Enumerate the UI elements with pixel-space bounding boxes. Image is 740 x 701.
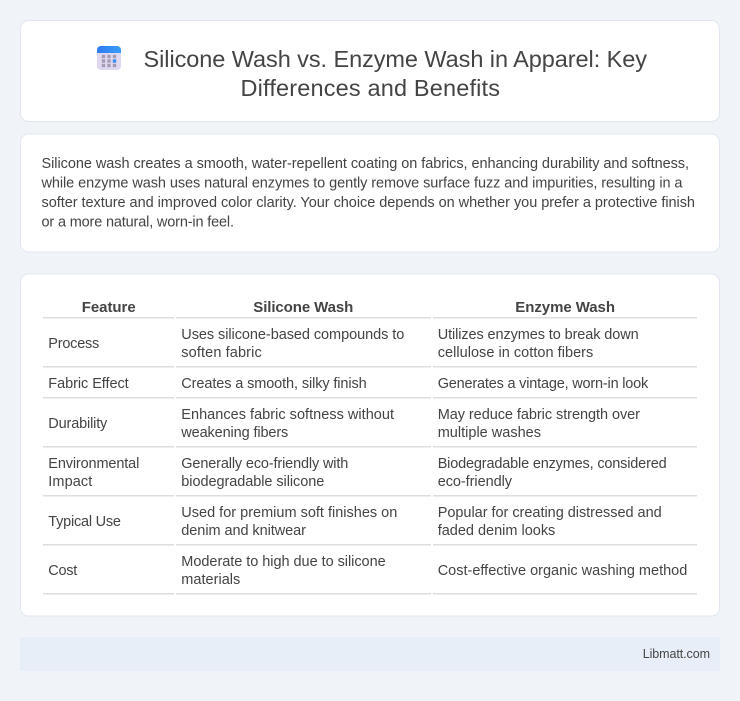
row: process: [48, 327, 639, 361]
row: typical use: [48, 505, 662, 539]
row: typical use: Used for premium soft finishes on: [181, 505, 397, 521]
row: fabric effect: Fabric Effect: [48, 376, 129, 392]
title: Silicone Wash vs. Enzyme Wash in Apparel: Key: [144, 46, 647, 72]
row: process: cellulose in cotton fibers: [438, 345, 593, 361]
row: cost: Cost-effective organic washing method: [438, 563, 687, 579]
row: cost: Moderate to high due to silicone: [181, 554, 386, 570]
row: durability: May reduce fabric strength over: [438, 407, 640, 423]
row: cost: materials: [181, 572, 240, 588]
text block: summary paragraph: Silicone wash creates a smooth, water-repellent coating on fabrics, enhancing durability and softness,: [42, 156, 689, 172]
row: typical use: faded denim looks: [438, 523, 555, 539]
row: environmental impact: Generally eco-friendly with: [181, 456, 348, 472]
title: Differences and Benefits: [240, 75, 500, 101]
row: fabric effect: Generates a vintage, worn-in look: [438, 376, 649, 392]
row: typical use: Popular for creating distressed and: [438, 505, 662, 521]
row: process: soften fabric: [181, 345, 262, 361]
title: [144, 46, 647, 101]
row: typical use: Typical Use: [48, 514, 121, 530]
footer: [20, 637, 720, 671]
table header row: Feature: [82, 299, 136, 316]
icon: calendar: [97, 46, 121, 70]
row: environmental impact: biodegradable silicone: [181, 474, 324, 490]
row: environmental impact: Impact: [48, 474, 92, 490]
panel: introduction: [20, 134, 720, 252]
row: durability: weakening fibers: [180, 425, 288, 441]
row: environmental impact: Environmental: [48, 456, 139, 472]
row: durability: Enhances fabric softness without: [181, 407, 394, 423]
text block: summary paragraph: softer texture and improved color clarity. Your choice depends on whether you prefer a protective finish: [42, 195, 695, 211]
row: durability: multiple washes: [438, 425, 541, 441]
row: environmental impact: Biodegradable enzymes, considered: [438, 456, 667, 472]
row: environmental impact: [48, 456, 667, 490]
row: process: Uses silicone-based compounds to: [181, 327, 404, 343]
table header row: Enzyme Wash: [515, 299, 615, 316]
row: fabric effect: [48, 376, 649, 392]
row: process: Utilizes enzymes to break down: [438, 327, 639, 343]
row: process: Process: [48, 336, 99, 352]
row: environmental impact: eco-friendly: [438, 474, 513, 490]
row: cost: [48, 554, 687, 588]
panel: comparison table: [20, 274, 720, 616]
row: durability: Durability: [48, 416, 108, 432]
row: fabric effect: Creates a smooth, silky finish: [181, 376, 367, 392]
panel: header: [20, 20, 720, 122]
row: typical use: denim and knitwear: [181, 523, 306, 539]
row: durability: [48, 407, 640, 441]
text block: summary paragraph: while enzyme wash uses natural enzymes to gently remove surface fuzz and impurities, resulting in a: [40, 176, 683, 192]
table header row: Silicone Wash: [253, 299, 353, 316]
text block: summary paragraph: [40, 156, 695, 230]
row: cost: Cost: [48, 563, 77, 579]
table header row: [82, 299, 615, 316]
footer credit: Libmatt.com: [643, 647, 710, 661]
text block: summary paragraph: or a more natural, worn-in feel.: [42, 214, 234, 230]
